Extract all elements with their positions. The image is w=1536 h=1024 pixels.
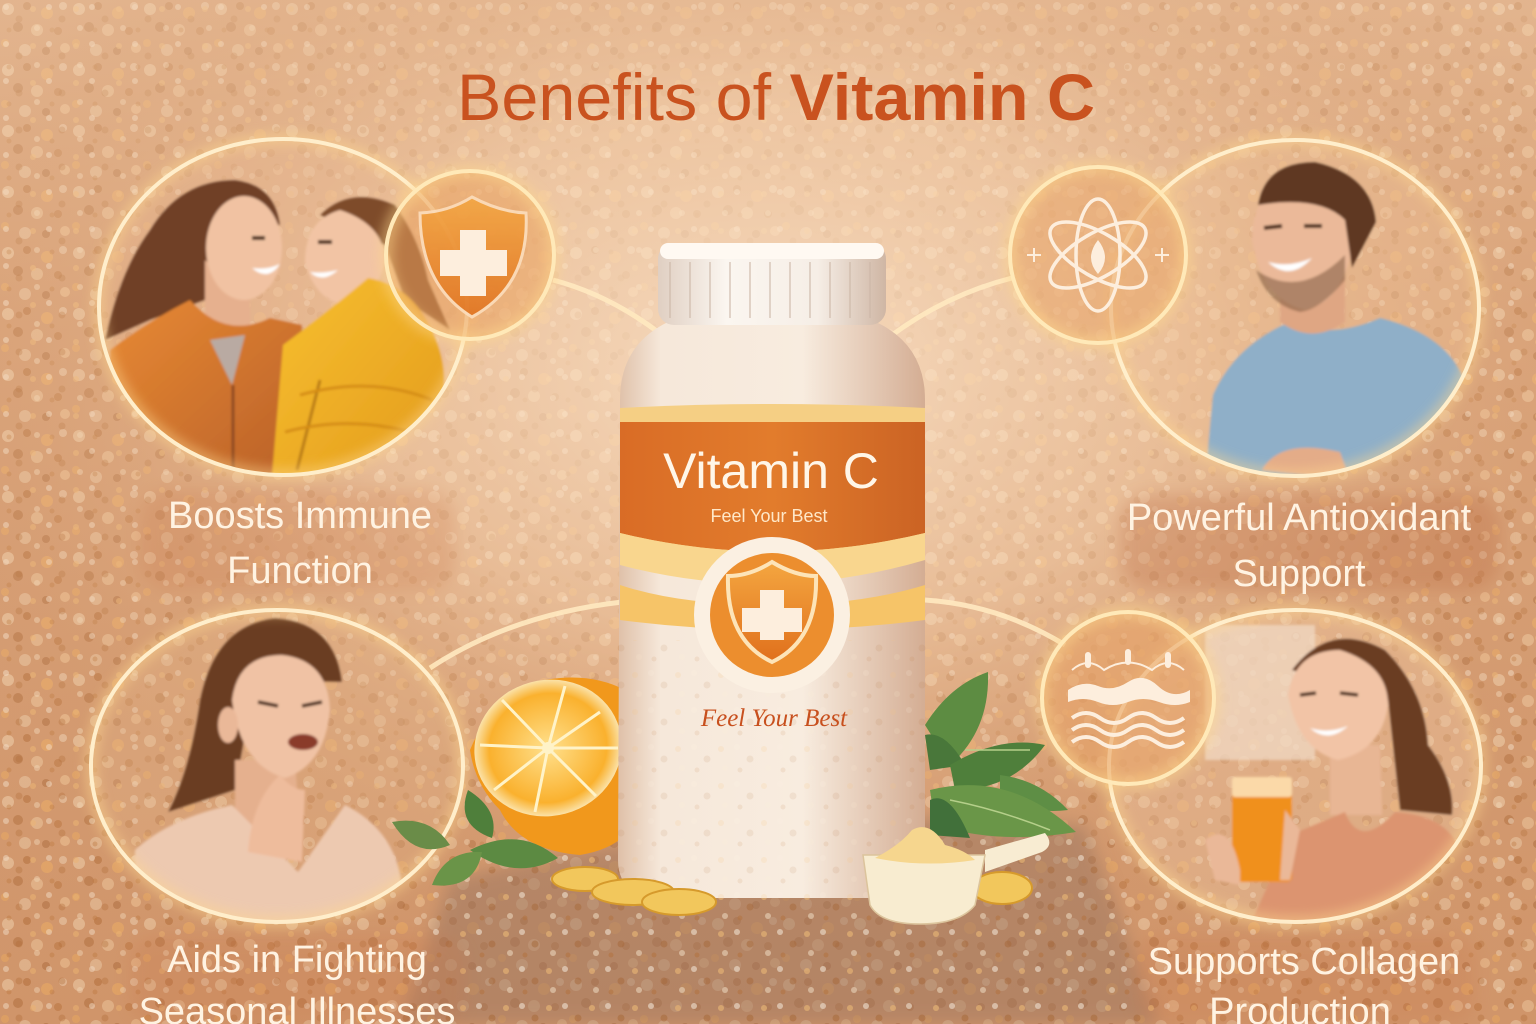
mint leaves [392,672,1076,886]
panel: seasonal illnesses [91,610,465,1024]
photo: smiling man [1156,148,1474,474]
icon: collagen layers [1042,612,1214,784]
panel: antioxidant [1010,140,1500,595]
icon: shield with cross [386,171,554,339]
supplement bottle: Feel Your Best [710,506,828,526]
label [140,490,455,592]
measuring scoop with powder [863,827,1049,924]
connector lines [430,278,1065,668]
label: Support [1232,553,1366,595]
supplement bottle [618,243,925,898]
ring [91,610,463,922]
panel: collagen [1042,610,1481,1024]
brand text: Vitamin C [663,443,879,499]
title: Benefits of Vitamin C [457,60,1095,134]
label: Powerful Antioxidant [1127,497,1472,539]
photo: woman with sore throat [92,611,462,925]
label: Aids in Fighting [167,939,427,981]
orange half [459,663,637,855]
tagline: Feel Your Best [700,705,848,732]
label: Supports Collagen [1148,941,1460,983]
ring [1109,610,1481,922]
label: Function [227,550,373,592]
ring [1111,140,1479,476]
photo: mother and daughter [104,170,450,473]
label [1135,935,1475,1024]
label: Boosts Immune [168,495,432,537]
label [1120,495,1500,595]
bottle cap [658,243,886,325]
label [130,935,465,1024]
softgel capsules [552,867,1032,915]
bottle body [618,322,925,898]
icon: bottle shield badge [694,537,850,693]
panel: immune function [99,139,554,592]
ring [99,139,467,475]
photo: woman with juice [1110,611,1480,925]
icon: atom [1010,167,1186,343]
label band [620,404,925,555]
